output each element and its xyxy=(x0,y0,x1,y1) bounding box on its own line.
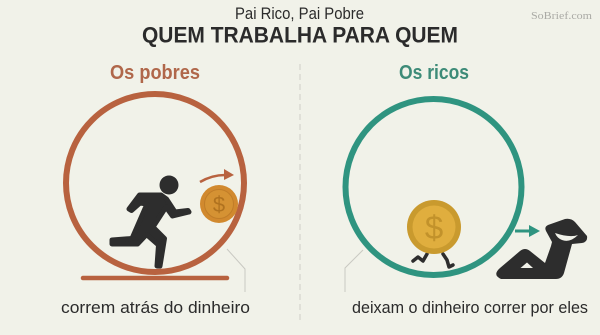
icon: coin left: $ xyxy=(213,192,225,217)
caption left: correm atrás do dinheiro xyxy=(61,299,250,317)
icon: coin left xyxy=(200,185,238,223)
panel: os ricos xyxy=(345,62,588,317)
subtitle: Pai Rico, Pai Pobre xyxy=(235,5,364,23)
arrow: to investor xyxy=(515,225,540,237)
title: QUEM TRABALHA PARA QUEM xyxy=(142,22,458,48)
icon: running person xyxy=(112,176,189,266)
hamster wheel left xyxy=(66,94,244,272)
panel: os pobres xyxy=(61,62,250,317)
watermark: SoBrief.com xyxy=(531,11,592,22)
icon: coin with legs: $ xyxy=(425,209,443,246)
heading: os ricos: Os ricos xyxy=(399,62,469,84)
caption right: deixam o dinheiro correr por eles xyxy=(352,299,588,317)
arrow: curved over coin xyxy=(200,169,234,182)
heading: os pobres: Os pobres xyxy=(110,62,200,84)
hamster wheel right xyxy=(346,99,522,275)
leader line left xyxy=(227,249,245,292)
ground line xyxy=(83,276,227,280)
icon: coin with legs xyxy=(407,200,461,267)
icon: relaxing person xyxy=(496,219,587,279)
leader line right xyxy=(345,250,363,292)
